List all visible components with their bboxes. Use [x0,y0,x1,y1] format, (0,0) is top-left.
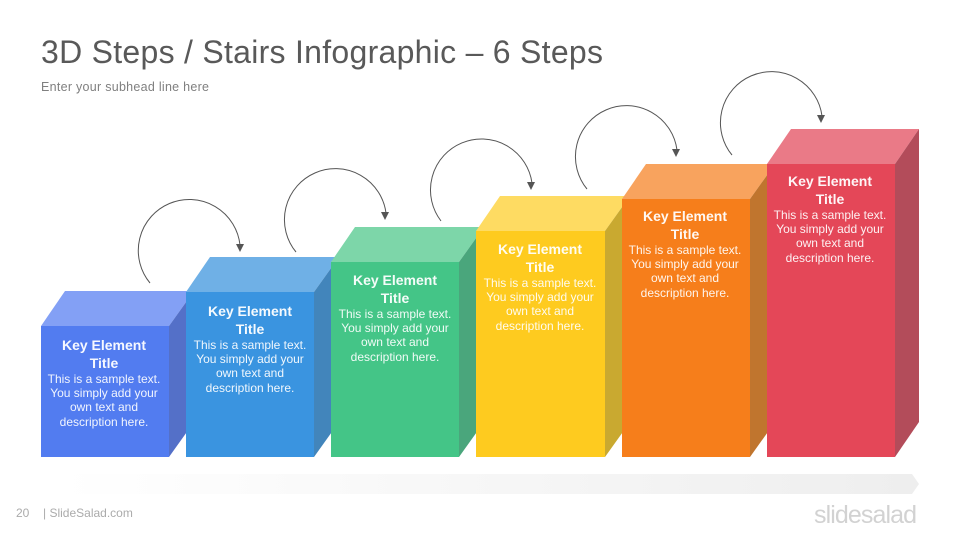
step 6: own text and [796,236,864,250]
step 2: Title [236,321,264,337]
title: 3D Steps / Stairs Infographic – 6 Steps [41,34,603,70]
step 3: Title [381,290,409,306]
step 2: This is a sample text. [194,338,306,352]
step 4: Title [526,259,554,275]
step 5 [622,164,775,457]
step 4: You simply add your [486,290,594,304]
arc arrow 1 [138,199,244,283]
step 3: own text and [361,335,429,349]
step 6: You simply add your [776,222,884,236]
step 1: description here. [60,415,148,429]
step 6 [767,129,919,457]
subhead: Enter your subhead line here [41,80,209,94]
step 1 [41,291,194,457]
step 6: Key Element [788,173,872,189]
step 6: This is a sample text. [774,208,886,222]
step 1: Title [90,355,118,371]
footer link: | SlideSalad.com [43,506,133,520]
step 3: Key Element [353,272,437,288]
step 5: You simply add your [631,257,739,271]
step 5: Title [671,226,699,242]
step 1: own text and [70,400,138,414]
step 4 [476,196,630,457]
step 5: description here. [641,286,729,300]
step 2: description here. [206,381,294,395]
arc arrow 3 [430,139,535,221]
step 6: description here. [786,251,874,265]
step 4: This is a sample text. [484,276,596,290]
step 2 [186,257,339,457]
step 4: Key Element [498,241,582,257]
arc arrow 4 [575,106,680,189]
step 3: description here. [351,350,439,364]
step 1: This is a sample text. [48,372,160,386]
page number: 20 [16,506,30,520]
step 2: You simply add your [196,352,304,366]
step 6: Title [816,191,844,207]
step 2: Key Element [208,303,292,319]
step 2: own text and [216,366,284,380]
arc arrow 5 [720,72,825,155]
step 3: This is a sample text. [339,307,451,321]
step 4: description here. [496,319,584,333]
step 3 [331,227,484,457]
step 1: You simply add your [50,386,158,400]
step 5: This is a sample text. [629,243,741,257]
step 5: Key Element [643,208,727,224]
step 1: Key Element [62,337,146,353]
step 4: own text and [506,304,574,318]
step 5: own text and [651,271,719,285]
logo: slidesalad [814,501,917,529]
arc arrow 2 [284,169,389,252]
step 3: You simply add your [341,321,449,335]
timeline arrow [60,474,919,494]
